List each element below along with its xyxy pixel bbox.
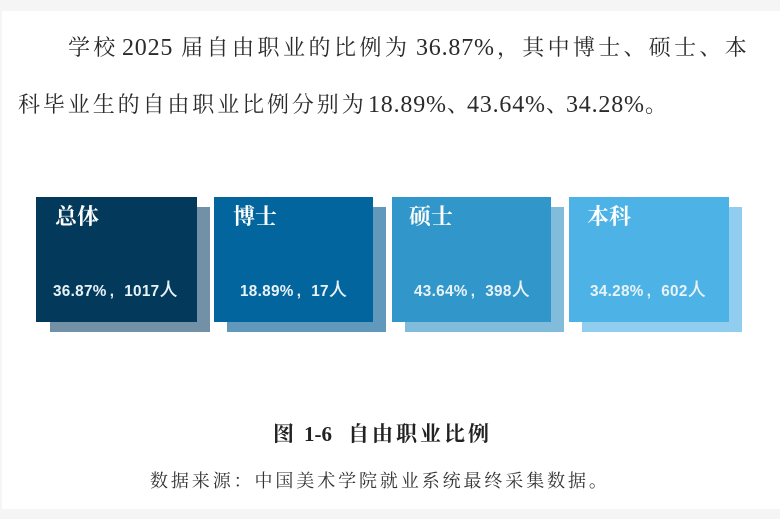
card: undergraduate: 本科 bbox=[587, 204, 631, 229]
body text line 1: 2025 bbox=[122, 35, 173, 61]
body text line 2: 18.89% bbox=[368, 92, 447, 118]
body text line 2: 。 bbox=[645, 92, 670, 117]
body text line 1: 学校 bbox=[68, 35, 119, 60]
card: overall: 总体 bbox=[55, 204, 99, 229]
card: overall: , bbox=[110, 283, 114, 300]
card: overall bbox=[36, 197, 210, 332]
body text line 2 bbox=[18, 92, 670, 118]
card: undergraduate bbox=[569, 197, 742, 332]
body text line 2: 科毕业生的自由职业比例分别为 bbox=[18, 92, 367, 117]
data source note: 数据来源：中国美术学院就业系统最终采集数据。 bbox=[150, 471, 610, 491]
card: doctoral: , bbox=[297, 283, 301, 300]
card: doctoral bbox=[214, 197, 386, 332]
card: master: 43.64% 398人 bbox=[414, 280, 530, 300]
body text line 1: ，其中博士、硕士、本 bbox=[497, 35, 750, 60]
card: undergraduate: , bbox=[647, 283, 651, 300]
card: doctoral: 18.89% 17人 bbox=[240, 280, 347, 300]
body text line 1: 届自由职业的比例为 bbox=[181, 35, 411, 60]
figure caption: 自由职业比例 bbox=[348, 422, 492, 446]
card: master: 硕士 bbox=[409, 204, 453, 229]
card: doctoral: 博士 bbox=[233, 204, 277, 229]
card: undergraduate: 34.28% 602人 bbox=[590, 280, 706, 300]
figure caption: 图 bbox=[273, 422, 294, 446]
card: master bbox=[392, 197, 564, 332]
body text line 2: 34.28% bbox=[566, 92, 645, 118]
body text line 1: 36.87% bbox=[416, 35, 495, 61]
body text line 2: 、 bbox=[546, 92, 571, 117]
chart: free-lance ratio cards bbox=[36, 197, 742, 332]
figure caption bbox=[273, 422, 492, 446]
card: overall: 36.87% 1017人 bbox=[53, 280, 177, 300]
figure caption: 1-6 bbox=[304, 422, 332, 446]
body text line 2: 43.64% bbox=[467, 92, 546, 118]
body text line 1 bbox=[68, 35, 750, 61]
card: master: , bbox=[471, 283, 475, 300]
body text line 2: 、 bbox=[447, 92, 472, 117]
